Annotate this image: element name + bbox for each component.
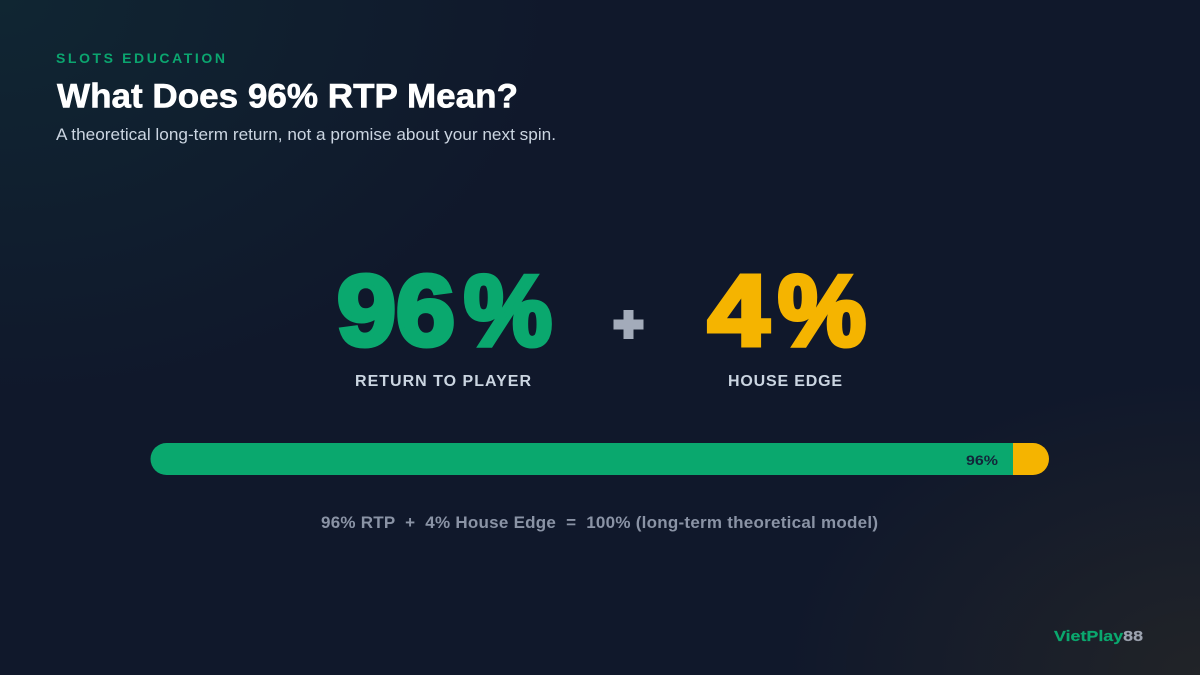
bar value label: 96% <box>966 452 999 468</box>
big number 96%: 96 <box>337 255 455 367</box>
progress bar: 96 / 4 split <box>150 443 1050 475</box>
big number 96%: % <box>464 255 552 367</box>
brand logo: VietPlay 88 <box>1054 628 1143 645</box>
big number 96% <box>337 255 552 367</box>
big number 4% <box>708 255 866 367</box>
bar segment: 96% green <box>150 443 1013 475</box>
icon: plus sign <box>614 310 644 339</box>
stat: 4% house edge <box>708 255 866 390</box>
title: What Does 96% RTP Mean? <box>57 78 518 116</box>
equation caption: 96% RTP + 4% House Edge = 100% (long-term theoretical model) <box>321 513 878 532</box>
label: return to player: RETURN TO PLAYER <box>355 373 531 390</box>
big number 4%: % <box>778 255 866 367</box>
big number 4%: 4 <box>708 255 769 367</box>
stat: 96% return to player <box>337 255 552 390</box>
label: house edge: HOUSE EDGE <box>728 373 842 390</box>
subtitle: A theoretical long-term return, not a promise about your next spin. <box>56 125 556 144</box>
bar segment: 4% amber <box>1013 443 1050 475</box>
eyebrow: slots education: SLOTS EDUCATION <box>56 50 225 66</box>
